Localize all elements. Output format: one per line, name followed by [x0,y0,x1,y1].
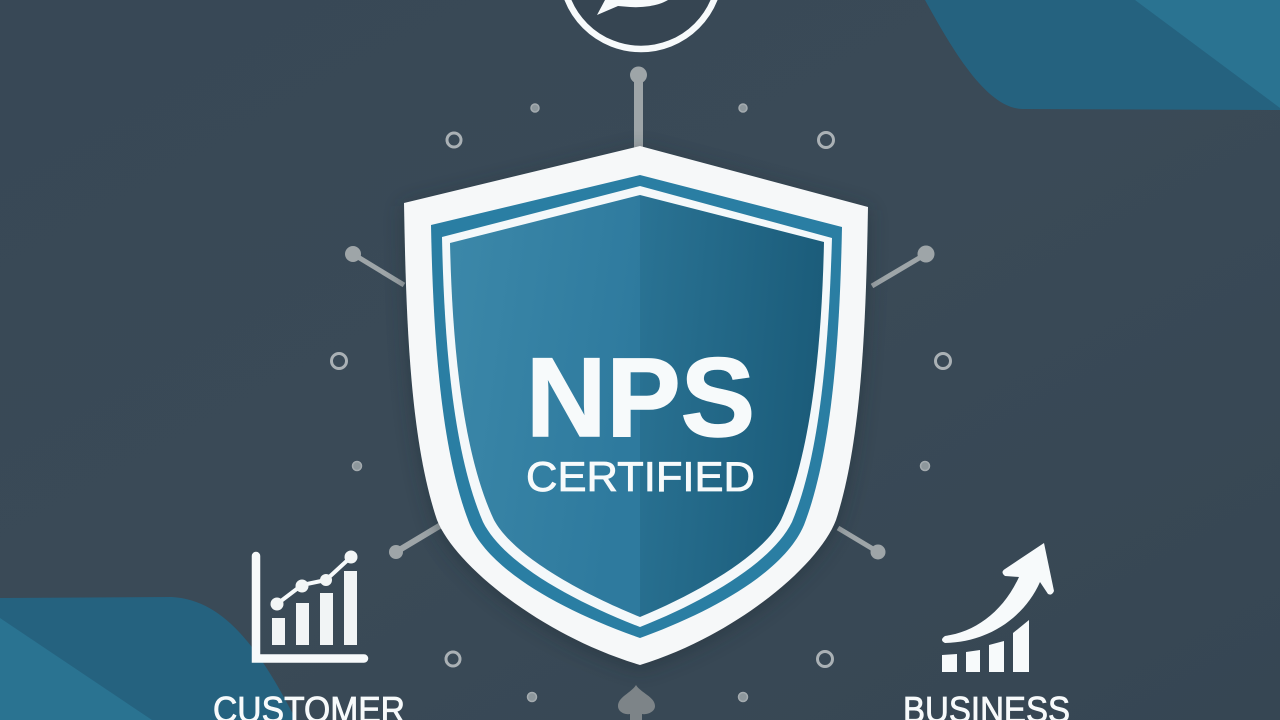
shield blue band [431,175,842,638]
connector: upper right [872,246,934,286]
icon: speech bubble in circle, top [562,0,720,49]
connector: top [630,66,647,148]
shield badge [404,146,868,669]
decorative dots [352,104,930,702]
title: NPS: NPS [526,335,755,460]
connector: upper left [345,246,404,285]
decorative rings [332,132,950,666]
decorative corner: bottom left [0,597,296,720]
shield inner white line [442,186,832,627]
subtitle: CERTIFIED: CERTIFIED [526,453,755,500]
decorative corner: top right [925,0,1280,110]
shield white rim [404,146,868,665]
connector: lower left [389,525,441,559]
shield panel right half [640,195,824,617]
shield panel left half [450,195,640,617]
icon: business growth arrow and bars [942,543,1054,672]
connector: bottom [618,685,655,720]
connector: lower right [838,528,886,560]
icon: customer bar chart with trend line [256,550,364,658]
